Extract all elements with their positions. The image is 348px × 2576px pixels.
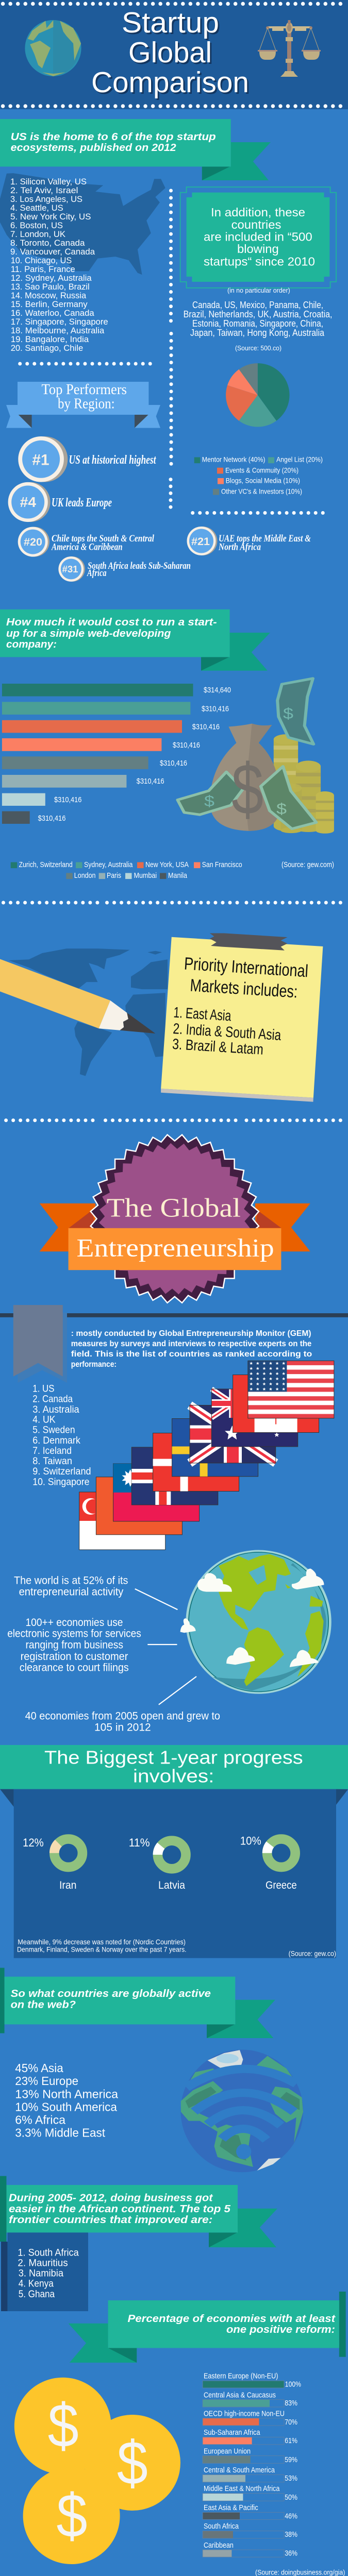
ribbon: globally active on the web: So what countries are globally active (11, 1988, 211, 1999)
list: top 20 startup ecosystems: 4. Seattle, US (10, 203, 63, 213)
list: top 20 startup ecosystems: 10. Chicago, US (11, 256, 72, 265)
flag: Taiwan (113, 1464, 200, 1521)
bar chart legend: Zurich, Switzerland (19, 861, 73, 869)
badge: #4 UK (8, 482, 112, 522)
banner: top performers by region: Top Performers (41, 382, 127, 398)
bar chart: economies with positive reform: East Asia & Pacific (204, 2503, 258, 2512)
bar chart: economies with positive reform: 83% (285, 2399, 297, 2408)
note: Nordic decrease: Denmark, Finland, Sweden & Norway over the past 7 years. (17, 1945, 187, 1954)
flag: United Kingdom (190, 1405, 276, 1463)
text: electronic systems: registration to customer (21, 1651, 128, 1663)
illustration: money bag, coins and bills: $ (231, 749, 263, 829)
banner: top performers by region: by Region: (58, 396, 115, 412)
sticky note: priority international markets (161, 933, 323, 1102)
title: Comparison (91, 66, 249, 99)
illustration: money bag, coins and bills: $ (276, 801, 287, 818)
donut: Latvia (129, 1836, 186, 1891)
donut: Greece: 10% (240, 1835, 261, 1848)
list: top 20 startup ecosystems: 3. Los Angeles, US (10, 194, 82, 204)
bar chart: economies with positive reform: 59% (285, 2455, 297, 2464)
pointer lines (135, 1589, 196, 1705)
ribbon: cost to run a start-up: How much it would cost to run a start- (6, 617, 217, 628)
list: top 10 countries: 8. Taiwan (32, 1456, 72, 1467)
note: Nordic decrease: (Source: gew.co) (289, 1950, 336, 1958)
badge: #4 UK: UK leads Europe (52, 496, 112, 510)
panel: top 5 frontier countries: 4. Kenya (19, 2279, 54, 2290)
list: top 20 startup ecosystems: 17. Singapore, Singapore (11, 317, 108, 327)
bar chart: economies with positive reform: OECD high-income Non-EU (204, 2409, 285, 2418)
title: Global (128, 36, 212, 69)
list: top 20 startup ecosystems: 20. Santiago, Chile (11, 343, 83, 353)
list: top 10 countries: 4. UK (32, 1415, 56, 1426)
bar chart legend: Sydney, Australia (84, 861, 133, 869)
panel: top 5 frontier countries: 5. Ghana (19, 2289, 55, 2300)
list: top 20 startup ecosystems: 11. Paris, France (11, 264, 75, 274)
icon: pencil (0, 959, 155, 1033)
ribbon: doing business in Africa: frontier countries that improved are: (9, 2214, 212, 2226)
icon: gold coins: $ (117, 2429, 148, 2498)
sticky note: priority international markets: 1. East Asia (173, 1005, 232, 1024)
text: countries list: (Source: 500.co) (235, 344, 281, 352)
text: GEM description: performance: (71, 1360, 117, 1369)
list: web activity by region: 23% Europe (15, 2074, 78, 2088)
note: Nordic decrease: Meanwhile, 9% decrease was noted for (Nordic Countries) (18, 1938, 186, 1946)
panel: top 5 frontier countries: 3. Namibia (19, 2268, 63, 2279)
text: electronic systems: ranging from business (26, 1639, 123, 1651)
pie legend: Blogs, Social Media (10%) (226, 477, 300, 485)
sticky note: priority international markets: Priority International (184, 954, 309, 981)
ribbon: doing business in Africa: easier in the African continent. The top 5 (9, 2204, 231, 2215)
map: world silhouette (9, 948, 168, 1076)
badge: #31 South Africa: Africa (87, 568, 107, 579)
badge: the global entrepreneurship: The Global (107, 1193, 241, 1223)
bar chart: startup cost by city (2, 684, 231, 824)
text: GEM description: field. This is the list of countries as ranked according to (71, 1350, 312, 1359)
bar chart legend (11, 861, 334, 880)
donut: Latvia: Latvia (158, 1879, 185, 1891)
bar chart: economies with positive reform: 46% (285, 2512, 297, 2520)
donut: Greece (240, 1835, 297, 1891)
icon: wifi globe (180, 2049, 303, 2172)
badge: #20 Chile: Chile tops the South & Central (52, 533, 155, 544)
text: countries list: (in no particular order) (227, 286, 290, 294)
flag: United States (248, 1361, 334, 1418)
bar chart: economies with positive reform: Central & South America (204, 2466, 275, 2475)
callout: in addition, these countries: startups“ since 2010 (204, 255, 315, 268)
bar chart: startup cost by city: $310,416 (38, 814, 65, 823)
banner: top performers by region (6, 382, 160, 428)
bar chart: economies with positive reform: Caribbean (204, 2541, 234, 2550)
text: electronic systems: electronic systems for services (7, 1628, 141, 1640)
text: GEM description: measures by surveys and interviews to respective experts on the (71, 1340, 311, 1348)
text: GEM description (71, 1329, 312, 1369)
list: top 10 countries: 9. Switzerland (32, 1466, 91, 1477)
pie legend: Other VC's & Investors (10%) (221, 487, 302, 496)
badge: #1 US: US at historical highest (69, 453, 156, 467)
list: top 20 startup ecosystems: 8. Toronto, Canada (10, 238, 85, 248)
list: top 20 startup ecosystems: 12. Sydney, Australia (11, 273, 92, 283)
icon: balance scales (258, 20, 321, 77)
sticky note: priority international markets: 2. India & South Asia (173, 1021, 282, 1044)
donut: Latvia: 11% (129, 1836, 150, 1849)
flag: Denmark (153, 1433, 239, 1491)
donut: Iran (23, 1836, 82, 1891)
list: top 20 startup ecosystems: 6. Boston, US (10, 221, 63, 230)
list: web activity by region: 45% Asia (15, 2061, 63, 2075)
sticky note: priority international markets: 3. Brazil & Latam (172, 1036, 264, 1058)
donut: Iran: Iran (59, 1879, 76, 1891)
panel: top 5 frontier countries (1, 2232, 88, 2311)
pie legend: Angel List (20%) (276, 455, 323, 464)
bar chart legend: (Source: gew.com) (281, 861, 334, 869)
badge: the global entrepreneurship: Entrepreneurship (76, 1233, 274, 1262)
ribbon: US is the home (0, 119, 271, 180)
flags stack (79, 1361, 334, 1550)
list: top 20 startup ecosystems: 7. London, UK (10, 229, 66, 239)
panel: top 5 frontier countries: 1. South Africa (18, 2248, 79, 2259)
text: electronic systems: clearance to court filings (20, 1662, 129, 1674)
bar chart: economies with positive reform (203, 2371, 301, 2557)
ribbon: positive reform: Percentage of economies with at least (128, 2313, 336, 2325)
text: electronic systems (7, 1617, 141, 1674)
title: Startup (122, 6, 219, 39)
list: top 20 startup ecosystems (10, 177, 108, 353)
pie legend: Mentor Network (40%) (202, 455, 265, 464)
title: Global (130, 38, 213, 71)
note: Nordic decrease (17, 1938, 336, 1958)
list: top 10 countries: 7. Iceland (32, 1446, 72, 1456)
text: world entrepreneurial activity: entrepreneurial activity (19, 1586, 124, 1598)
ribbon: positive reform: one positive reform: (226, 2324, 335, 2335)
bar chart legend: Manila (168, 872, 188, 880)
bar chart legend: Paris (107, 872, 121, 880)
badge: #31 South Africa: #31 (62, 564, 78, 574)
bar chart: economies with positive reform: 100% (285, 2380, 301, 2389)
heading band (0, 1745, 348, 1789)
list: top 10 countries: 2. Canada (32, 1394, 73, 1405)
list: web activity by region: 6% Africa (15, 2113, 65, 2127)
icon: earth globe (25, 20, 81, 76)
bar chart: economies with positive reform: 61% (285, 2436, 297, 2445)
callout: in addition, these countries: are included in “500 (204, 230, 312, 244)
list: top 10 countries: 6. Denmark (32, 1435, 80, 1446)
ribbon: doing business in Africa: During 2005- 2012, doing business got (9, 2193, 213, 2204)
list: top 20 startup ecosystems: 16. Waterloo, Canada (11, 308, 94, 318)
text: world entrepreneurial activity (14, 1574, 128, 1598)
bar chart: startup cost by city: $310,416 (54, 795, 81, 804)
bar chart: economies with positive reform: Central Asia & Caucasus (204, 2391, 276, 2399)
icon: gold coins: $ (56, 2481, 87, 2550)
list: top 20 startup ecosystems: 5. New York City, US (10, 212, 91, 222)
illustration: money bag, coins and bills: $ (283, 705, 293, 722)
donut: Greece: Greece (266, 1879, 297, 1891)
bar chart: economies with positive reform: 36% (285, 2549, 297, 2557)
text: countries list: Estonia, Romania, Singapore, China, (192, 318, 323, 329)
bar chart: economies with positive reform: South Africa (204, 2522, 239, 2531)
list: web activity by region: 13% North America (15, 2087, 118, 2100)
callout: in addition, these countries: blowing (237, 242, 279, 256)
illustration: earth with clouds (180, 1550, 332, 1694)
badge: #4 UK: #4 (20, 494, 36, 510)
illustration: money bag, coins and bills (177, 679, 334, 834)
panel: biggest 1-year progress (0, 1745, 348, 1958)
ribbon: doing business in Africa (0, 2176, 277, 2247)
donut: Iran: 12% (23, 1836, 44, 1849)
list: top 10 countries: 10. Singapore (32, 1477, 89, 1488)
callout: in addition, these countries (180, 187, 336, 288)
bar chart legend: New York, USA (145, 861, 189, 869)
bar chart: economies with positive reform: 38% (285, 2530, 297, 2539)
badge: #21 UAE: North Africa (218, 542, 261, 552)
title (91, 6, 251, 100)
badge: #20 Chile: #20 (24, 536, 42, 548)
text: countries list: Canada, US, Mexico, Panama, Chile, (192, 300, 323, 310)
heading band: The Biggest 1-year progress (44, 1747, 303, 1768)
list: web activity by region: 10% South America (15, 2100, 117, 2113)
ribbon: cost to run a start-up (0, 609, 270, 671)
panel: top 5 frontier countries: 2. Mauritius (18, 2258, 68, 2268)
bar chart: startup cost by city: $310,416 (192, 723, 220, 732)
flag: Sweden (172, 1419, 258, 1477)
title: Startup (123, 8, 221, 41)
ribbon: positive reform (69, 2292, 346, 2363)
bar chart: startup cost by city: $310,416 (173, 741, 200, 750)
ribbon: cost to run a start-up: up for a simple web-developing (6, 628, 171, 639)
bar chart legend: Mumbai (134, 872, 157, 880)
badge: the global entrepreneurship (40, 1134, 310, 1303)
list: top 20 startup ecosystems: 2. Tel Aviv, Israel (10, 185, 78, 195)
text: countries list: Brazil, Netherlands, UK, Austria, Croatia, (184, 309, 332, 319)
flag: Canada (233, 1375, 319, 1432)
badge: #21 UAE (187, 527, 311, 555)
ribbon: US is the home: ecosystems, published on 2012 (11, 142, 176, 154)
flag: Singapore (79, 1492, 165, 1550)
bar chart: economies with positive reform: Sub-Saharan Africa (204, 2428, 260, 2437)
list: top 20 startup ecosystems: 9. Vancouver, Canada (10, 247, 95, 257)
list: top 20 startup ecosystems: 18. Melbourne, Australia (11, 326, 105, 335)
list: top 10 countries: 5. Sweden (32, 1425, 75, 1436)
badge: #1 US (18, 436, 156, 482)
bar chart legend: San Francisco (202, 861, 242, 869)
icon: gold coins (14, 2378, 180, 2564)
badge: #31 South Africa: South Africa leads Sub-Saharan (88, 561, 191, 571)
flag: Australia (211, 1389, 298, 1447)
bar chart: economies with positive reform: European Union (204, 2447, 251, 2455)
bar chart: economies with positive reform: 53% (285, 2474, 297, 2483)
badge: #21 UAE: UAE tops the Middle East & (219, 533, 311, 544)
list: top 20 startup ecosystems: 19. Bangalore, India (11, 334, 89, 344)
bar chart: startup cost by city: $310,416 (137, 777, 164, 786)
text: GEM description: : mostly conducted by Global Entrepreneurship Monitor (GEM) (71, 1329, 311, 1338)
bar chart: economies with positive reform: Middle East & North Africa (204, 2484, 280, 2493)
bar chart: economies with positive reform: 50% (285, 2493, 297, 2502)
bar chart: startup cost by city: $314,640 (204, 686, 231, 694)
ribbon: US is the home: US is the home to 6 of the top startup (11, 131, 216, 143)
callout: in addition, these countries: countries (231, 218, 281, 231)
list: top 20 startup ecosystems: 1. Silicon Valley, US (10, 177, 87, 187)
bar chart: startup cost by city: $310,416 (202, 705, 229, 714)
divider with bookmark (0, 1305, 348, 1383)
list: web activity by region: 3.3% Middle East (15, 2126, 106, 2139)
sticky note: priority international markets: Markets includes: (190, 976, 298, 1002)
pie chart (226, 363, 290, 427)
pie legend: Events & Commuity (20%) (225, 466, 299, 474)
bar chart: economies with positive reform: 70% (285, 2418, 297, 2427)
text: 40 economies: 105 in 2012 (94, 1722, 151, 1734)
list: top 20 startup ecosystems: 14. Moscow, Russia (11, 291, 87, 300)
list: top 10 countries (32, 1384, 91, 1488)
badge: #31 South Africa (58, 556, 191, 582)
list: web activity by region (15, 2061, 118, 2139)
flag: Iceland (131, 1447, 218, 1505)
list: top 10 countries: 1. US (32, 1384, 55, 1395)
pie legend (194, 455, 323, 496)
illustration: money bag, coins and bills: $ (204, 793, 214, 810)
list: top 10 countries: 3. Australia (32, 1404, 79, 1415)
text: countries list: Japan, Taiwan, Hong Kong, Australia (190, 328, 325, 338)
list: top 20 startup ecosystems: 13. Sao Paulo, Brazil (11, 282, 90, 292)
text: electronic systems: 100++ economies use (26, 1617, 123, 1629)
text: 40 economies (25, 1710, 220, 1734)
bar chart: startup cost by city: $310,416 (160, 759, 187, 768)
title: Comparison (93, 67, 251, 100)
heading band: involves: (133, 1766, 214, 1787)
list: top 20 startup ecosystems: 15. Berlin, Germany (11, 299, 88, 309)
badge: #20 Chile (18, 527, 155, 557)
badge: #20 Chile: America & Caribbean (51, 542, 123, 552)
ribbon: globally active on the web: on the web? (11, 1999, 76, 2010)
bar chart legend: London (74, 872, 96, 880)
header panel (0, 0, 348, 109)
flag: Switzerland (96, 1477, 182, 1535)
map: USA silhouette (0, 173, 165, 275)
ribbon: cost to run a start-up: company: (6, 639, 57, 650)
bar chart: economies with positive reform: Eastern Europe (Non-EU) (204, 2371, 278, 2380)
callout: in addition, these countries: In addition, these (211, 206, 305, 219)
text: 40 economies: 40 economies from 2005 open and grew to (25, 1710, 220, 1722)
text: world entrepreneurial activity: The world is at 52% of its (14, 1574, 128, 1587)
text: countries list (184, 286, 332, 352)
icon: gold coins: $ (48, 2391, 79, 2460)
badge: #1 US: #1 (32, 452, 49, 469)
badge: #21 UAE: #21 (191, 536, 210, 548)
ribbon: globally active on the web (0, 1968, 275, 2038)
